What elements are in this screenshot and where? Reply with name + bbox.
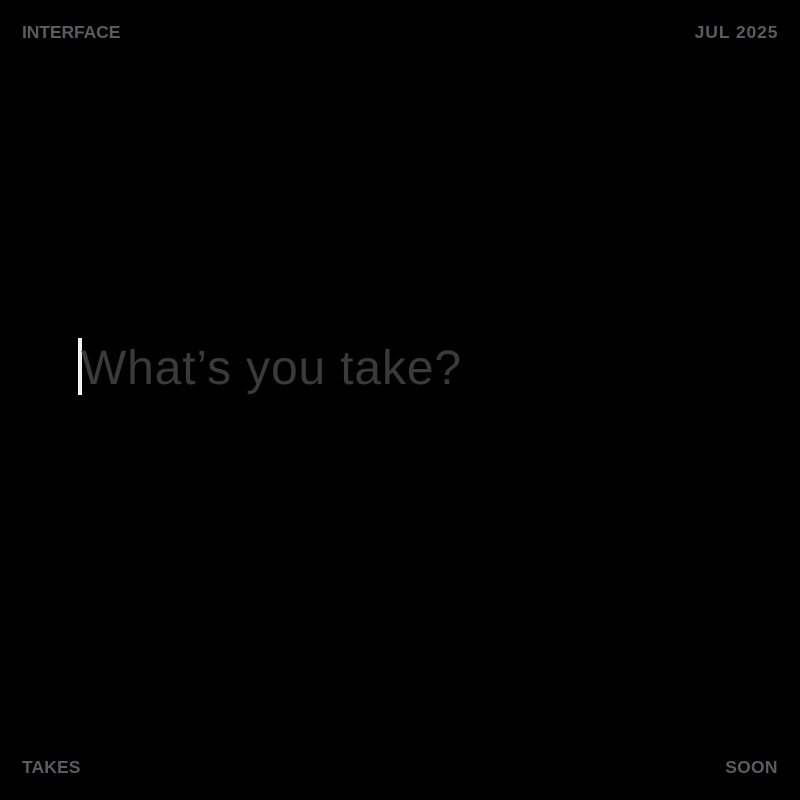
label: INTERFACE: INTERFACE xyxy=(22,22,120,42)
label: SOON: SOON xyxy=(725,757,778,777)
placeholder text: What’s you take? xyxy=(81,342,462,395)
input prompt xyxy=(78,338,462,395)
label: TAKES: TAKES xyxy=(22,757,81,777)
label: JUL 2025: JUL 2025 xyxy=(695,22,778,42)
text cursor xyxy=(78,338,82,395)
